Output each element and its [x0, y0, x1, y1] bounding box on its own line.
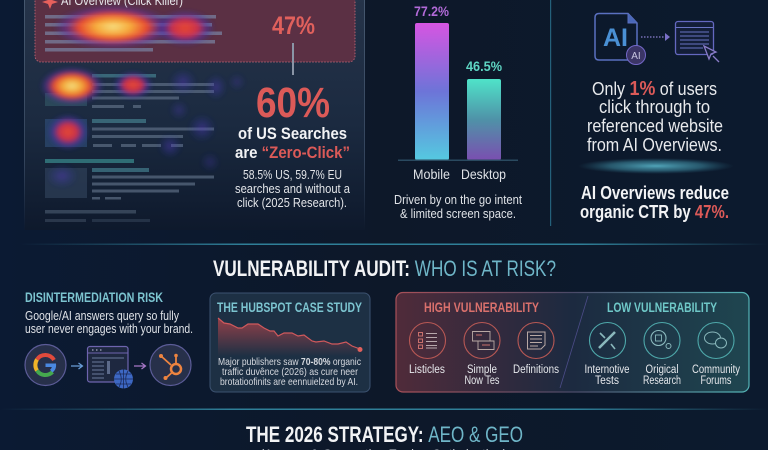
text: only 1% click through: from AI Overviews.: [587, 135, 722, 155]
item: interactive tools: Tests: [595, 375, 619, 387]
case study text: traffic duvênce (2026) as cure neer: [222, 366, 358, 378]
item: community forums: Forums: [700, 375, 732, 387]
skeleton result lines: [45, 15, 222, 222]
panel: high vs low vulnerability: LOW VULNERABILITY: [607, 300, 717, 315]
bar chart: zero-click by device: 46.5%: [466, 58, 502, 74]
zero-click detail text: click (2025 Research).: [237, 195, 347, 210]
heading: 2026 strategy: THE 2026 STRATEGY: AEO & GEO: [246, 422, 523, 447]
AI overview box: [35, 0, 355, 62]
panel: HubSpot case study: THE HUBSPOT CASE STUDY: [217, 300, 362, 315]
stat: 47%: 47%: [272, 12, 315, 40]
bar chart: zero-click by device: Desktop: [461, 166, 506, 182]
icon: HubSpot: [150, 344, 191, 386]
icon: Google: [25, 344, 66, 386]
zero-click detail text: searches and without a: [235, 181, 351, 196]
block: disintermediation risk: user never engages with your brand.: [25, 322, 193, 336]
text: only 1% click through: [587, 78, 723, 155]
bar chart: zero-click by device: Mobile: [413, 166, 450, 182]
glow separator: [578, 158, 734, 174]
stat: 60% zero-click: of US Searches: [238, 124, 347, 143]
text: only 1% click through: referenced website: [587, 116, 723, 136]
text: CTR reduction: organic CTR by 47%.: [580, 202, 729, 222]
panel: high vs low vulnerability: HIGH VULNERABILITY: [424, 300, 539, 315]
panel: heatmap of search results: [24, 0, 364, 230]
connector line: [292, 43, 294, 75]
block: disintermediation risk: DISINTERMEDIATION RISK: [25, 290, 163, 305]
heatmap blobs: [40, 5, 246, 188]
panel: HubSpot case study: [210, 293, 370, 392]
item: definitions: [513, 322, 559, 376]
item: interactive tools: [584, 322, 630, 387]
block: disintermediation risk: [25, 290, 193, 388]
bar chart: zero-click by device: 77.2%: [414, 3, 449, 19]
item: community forums: Community: [692, 364, 740, 376]
case study text: brotatioofinits are eennuielzed by AI.: [220, 376, 358, 388]
bar chart caption: [394, 193, 522, 221]
item: original research: Research: [643, 375, 681, 387]
item: original research: [643, 322, 681, 387]
text: only 1% click through: click through to: [599, 97, 710, 117]
icon: AI document to browser: AI: [603, 24, 628, 52]
item: simple how-tos: Simple: [467, 364, 497, 376]
stat: 60% zero-click: 60%: [256, 79, 330, 127]
line chart: traffic decline: [218, 318, 362, 356]
item: original research: Origical: [646, 364, 678, 376]
stat: 60% zero-click: are “Zero-Click”: [235, 143, 350, 162]
item: community forums: [692, 322, 740, 387]
bar chart: zero-click by device: [398, 3, 518, 182]
text: only 1% click through: Only 1% of users: [592, 78, 717, 100]
divider: [550, 0, 551, 226]
arrow: [134, 363, 146, 369]
arrow: [71, 363, 82, 369]
icon: AI document to browser: AI: [631, 51, 641, 62]
item: simple how-tos: [464, 322, 500, 387]
bar chart caption: & limited screen space.: [400, 207, 516, 221]
heading: vulnerability audit: VULNERABILITY AUDIT: WHO IS AT RISK?: [213, 256, 556, 281]
icon: browser with globe: [88, 346, 133, 388]
item: definitions: Definitions: [513, 364, 559, 376]
text: CTR reduction: AI Overviews reduce: [581, 183, 729, 203]
zero-click detail text: 58.5% US, 59.7% EU: [243, 167, 342, 182]
case study text: [218, 356, 361, 388]
panel: high vs low vulnerability: [396, 292, 749, 392]
icon: AI document to browser: [595, 14, 719, 64]
item: simple how-tos: Now Tes: [464, 375, 500, 387]
item: listicles: [409, 322, 446, 376]
zero-click detail text: [235, 167, 351, 210]
block: disintermediation risk: Google/AI answers query so fully: [25, 309, 180, 323]
case study text: Major publishers saw 70-80% organic: [218, 356, 361, 368]
text: CTR reduction: [580, 183, 729, 222]
stat: 60% zero-click: [235, 79, 350, 162]
bar chart caption: Driven by on the go intent: [394, 193, 522, 207]
item: listicles: Listicles: [409, 364, 445, 376]
item: interactive tools: Internotive: [584, 364, 630, 376]
